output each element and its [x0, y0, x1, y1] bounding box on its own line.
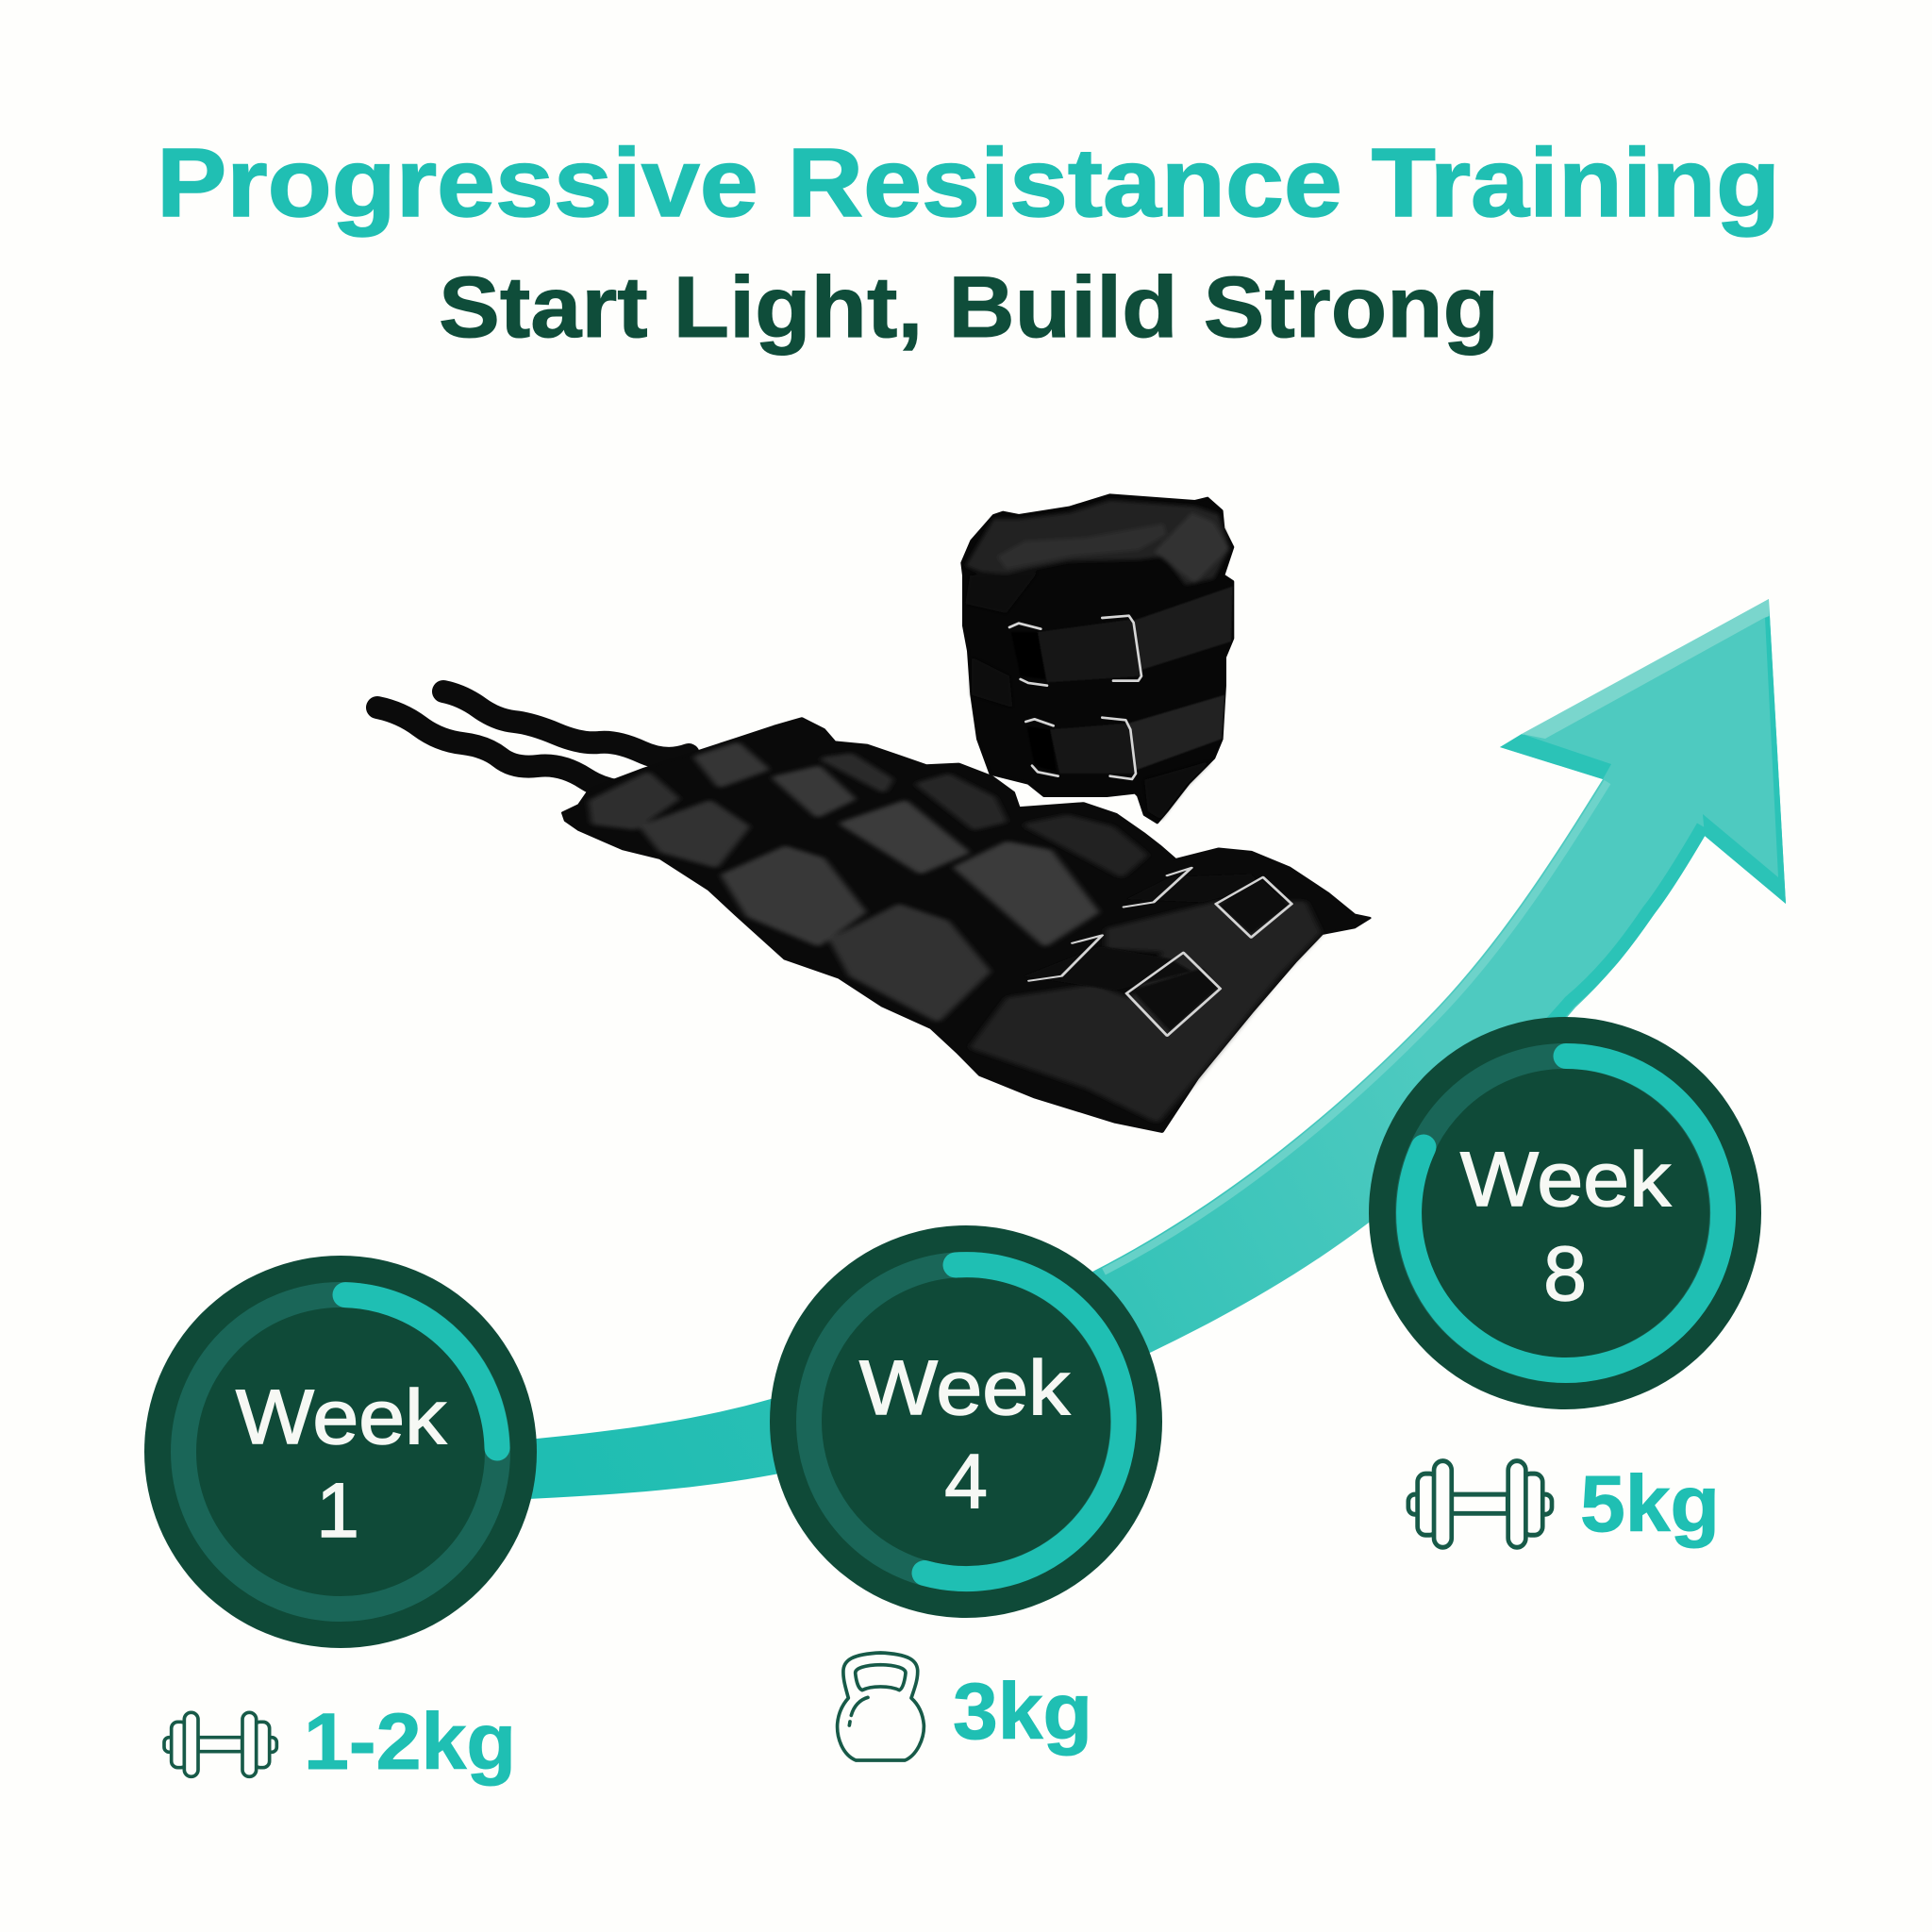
icon: kettlebell — [838, 1653, 924, 1760]
strap: rear — [443, 691, 689, 758]
inner lining and fabric bands — [965, 500, 1229, 819]
arrowhead facets — [1500, 599, 1786, 904]
label: 5kg: 5kg — [1580, 1459, 1720, 1548]
pouches — [593, 745, 1316, 1119]
milestone: week 1 — [144, 1256, 537, 1648]
icon: dumbbell 5kg — [1408, 1461, 1552, 1547]
velcro straps on end pouch — [1024, 874, 1289, 1031]
buckle rings — [1029, 868, 1291, 1036]
title: Progressive Resistance Training — [157, 128, 1780, 237]
milestone: week 1: 1 — [316, 1468, 359, 1554]
standing ankle weight — [962, 495, 1233, 823]
milestone: week 8 — [1369, 1017, 1761, 1409]
label: 3kg: 3kg — [953, 1667, 1092, 1756]
milestone: week 4: 4 — [944, 1439, 988, 1524]
flat ankle weight — [563, 719, 1369, 1132]
buckle rings — [1009, 616, 1141, 779]
growth arrow — [509, 599, 1786, 1500]
strap: front — [377, 708, 632, 791]
milestone: week 4 — [770, 1225, 1162, 1618]
milestone: week 8: 8 — [1543, 1231, 1587, 1317]
milestone: week 1: Week — [236, 1374, 447, 1460]
milestone: week 8: Week — [1460, 1137, 1672, 1223]
label: 1-2kg: 1-2kg — [304, 1697, 516, 1786]
milestone: week 4: Week — [859, 1345, 1071, 1431]
subtitle: Start Light, Build Strong — [439, 259, 1499, 356]
icon: dumbbell 1-2kg — [164, 1712, 276, 1776]
buckle straps — [1011, 587, 1233, 774]
